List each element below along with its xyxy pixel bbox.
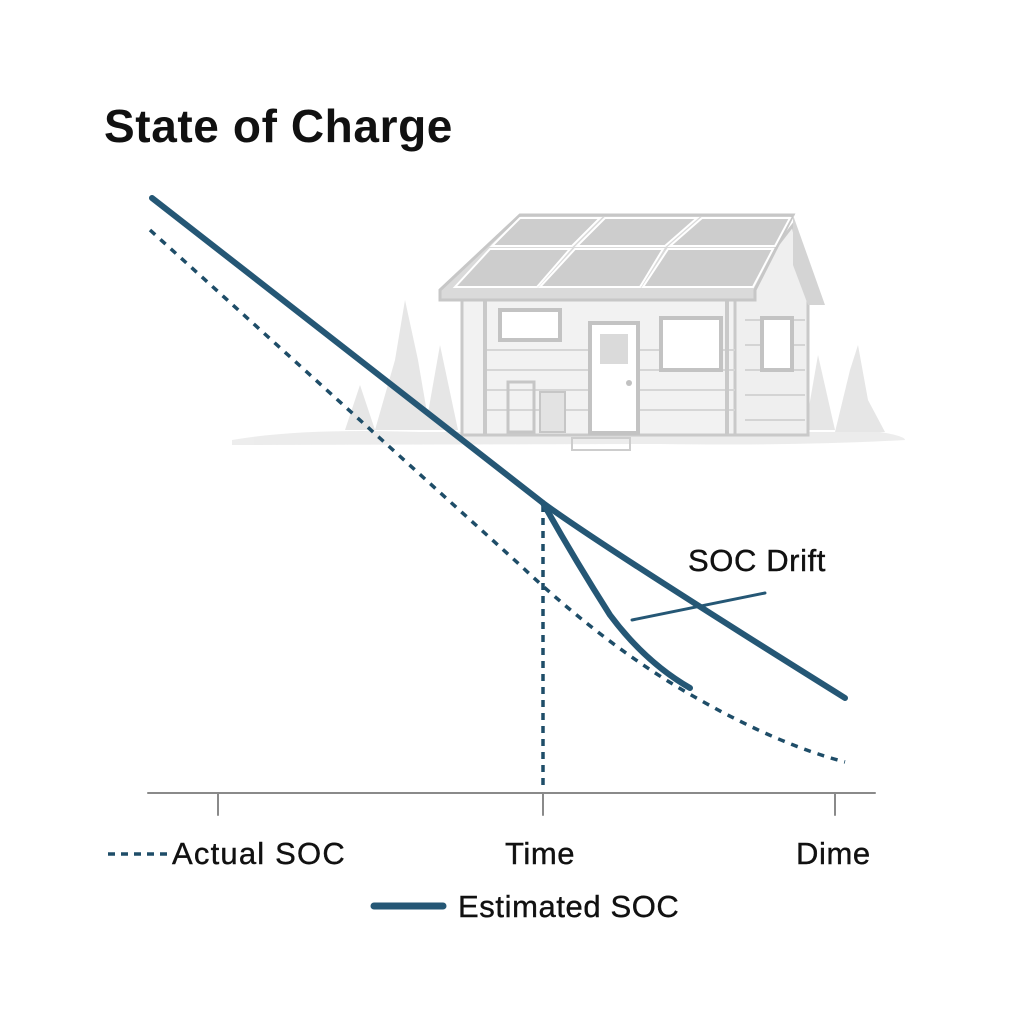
legend lines bbox=[108, 852, 168, 856]
estimated SOC bbox=[152, 198, 845, 698]
axis bbox=[148, 792, 875, 794]
drift branch bbox=[543, 503, 690, 688]
side wall bbox=[735, 225, 808, 435]
illustration: cabin with solar panels bbox=[232, 215, 905, 450]
legend: Estimated SOC: Estimated SOC bbox=[458, 889, 679, 924]
label: SOC Drift: SOC Drift bbox=[688, 543, 826, 578]
legend: Actual SOC: Actual SOC bbox=[172, 836, 346, 871]
roof bbox=[440, 215, 793, 300]
drift pointer bbox=[632, 593, 765, 620]
title: State of Charge bbox=[104, 100, 453, 152]
axis label: Time: Time bbox=[505, 836, 575, 871]
axis label: Dime: Dime bbox=[796, 836, 871, 871]
vertical dashed marker bbox=[541, 505, 545, 790]
chart bbox=[108, 198, 875, 906]
front wall bbox=[462, 300, 735, 435]
ground bbox=[232, 431, 905, 445]
actual SOC dashed bbox=[150, 230, 845, 762]
trees bbox=[345, 300, 885, 432]
